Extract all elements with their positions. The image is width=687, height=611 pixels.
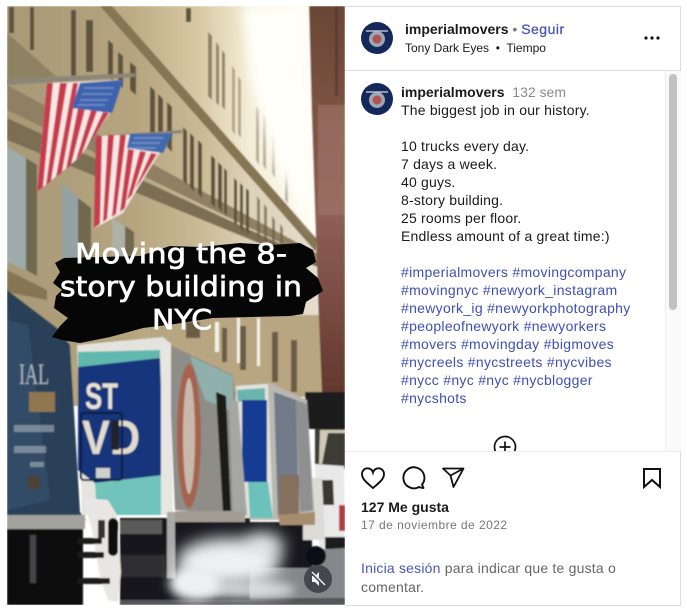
hashtags: #imperialmovers #movingcompany — [401, 264, 626, 280]
street scene — [7, 6, 345, 605]
title overlay text: story building in — [60, 270, 302, 303]
lower storeys behind trucks — [150, 315, 322, 397]
flag: lower — [94, 130, 183, 228]
hashtags — [401, 264, 631, 406]
street steam — [169, 532, 295, 601]
icon: like heart — [361, 467, 385, 490]
icon: more options — [644, 36, 660, 40]
dark awning and background street — [305, 392, 345, 469]
hashtags: #nycc #nyc #nyc #nycblogger — [401, 372, 593, 388]
truck: second: VD — [82, 412, 140, 465]
hashtags: #movers #movingday #bigmoves — [401, 336, 614, 352]
comment: avatar — [361, 83, 393, 115]
icon: muted audio button — [304, 565, 332, 593]
login prompt: comentar. — [361, 579, 424, 595]
comment: author and age: imperialmovers 132 sem — [401, 84, 566, 100]
neighbouring brick building — [309, 6, 345, 392]
hashtags: #peopleofnewyork #newyorkers — [401, 318, 606, 334]
scrollbar — [665, 71, 681, 451]
login prompt — [361, 560, 616, 595]
photo: moving trucks on a New York street with flags — [7, 6, 345, 605]
header divider — [345, 70, 680, 71]
brush stroke text backdrop — [52, 243, 323, 343]
hashtags: #nycshots — [401, 390, 467, 406]
hashtags: #newyork_ig #newyorkphotography — [401, 300, 631, 316]
login prompt: Inicia sesión para indicar que te gusta o — [361, 560, 616, 576]
icon: comment bubble — [402, 466, 426, 490]
windows lower left — [7, 147, 26, 270]
actions panel — [345, 451, 680, 605]
truck: first — [7, 290, 121, 605]
flag: upper — [7, 73, 136, 192]
header: account name and follow: imperialmovers • Seguir — [405, 21, 565, 37]
panel: post sidebar — [345, 6, 681, 606]
truck: third — [235, 383, 326, 568]
post date: 17 de noviembre de 2022 — [361, 518, 507, 532]
header: audio subtitle: Tony Dark Eyes • Tiempo — [405, 41, 546, 55]
caption text: The biggest job in our history. 10 trucks every day. 7 days a week. 40 guys. 8-story building. 25 rooms per floor. Endless amount of a great time:) — [401, 102, 610, 244]
building facade — [7, 6, 322, 406]
title overlay text: NYC — [152, 303, 212, 336]
title overlay text: Moving the 8- — [75, 237, 287, 270]
hashtags: #movingnyc #newyork_instagram — [401, 282, 617, 298]
distant white van — [315, 464, 345, 549]
hashtags: #nycreels #nycstreets #nycvibes — [401, 354, 612, 370]
title overlay text — [60, 237, 302, 336]
header: account avatar — [361, 22, 393, 54]
road — [120, 548, 345, 605]
icon: load more comments — [494, 436, 516, 451]
truck lettering: ST — [85, 376, 118, 417]
truck: second — [77, 337, 250, 600]
icon: share arrow — [442, 468, 464, 488]
truck lettering: IAL — [19, 358, 49, 391]
icon: bookmark — [643, 468, 661, 489]
likes count: 127 Me gusta — [361, 499, 449, 515]
